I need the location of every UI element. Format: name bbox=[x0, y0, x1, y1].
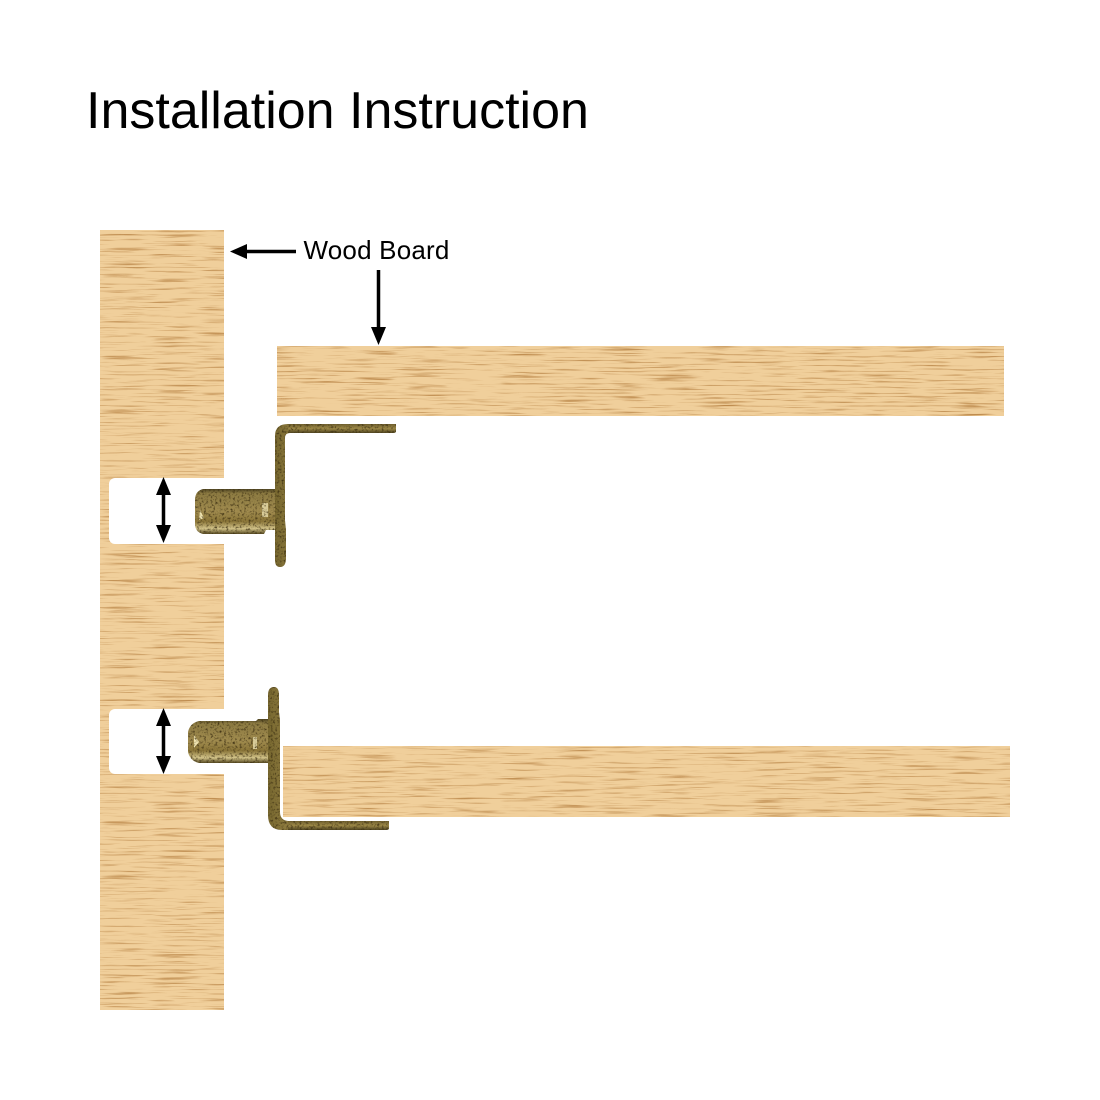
upper horizontal wood board bbox=[277, 346, 1004, 416]
arrow: label to horizontal board bbox=[371, 270, 386, 345]
double arrow: upper notch height bbox=[156, 477, 171, 543]
arrow: label to vertical board bbox=[230, 244, 296, 259]
title: Installation Instruction bbox=[86, 82, 589, 140]
vertical wood board with two drilled notches bbox=[100, 230, 224, 1010]
double arrow: lower notch height bbox=[156, 708, 171, 774]
lower horizontal wood board bbox=[283, 746, 1010, 817]
label: Wood Board: Wood Board bbox=[304, 235, 450, 265]
upper shelf support bracket bbox=[195, 424, 396, 567]
lower shelf support bracket bbox=[188, 687, 389, 830]
